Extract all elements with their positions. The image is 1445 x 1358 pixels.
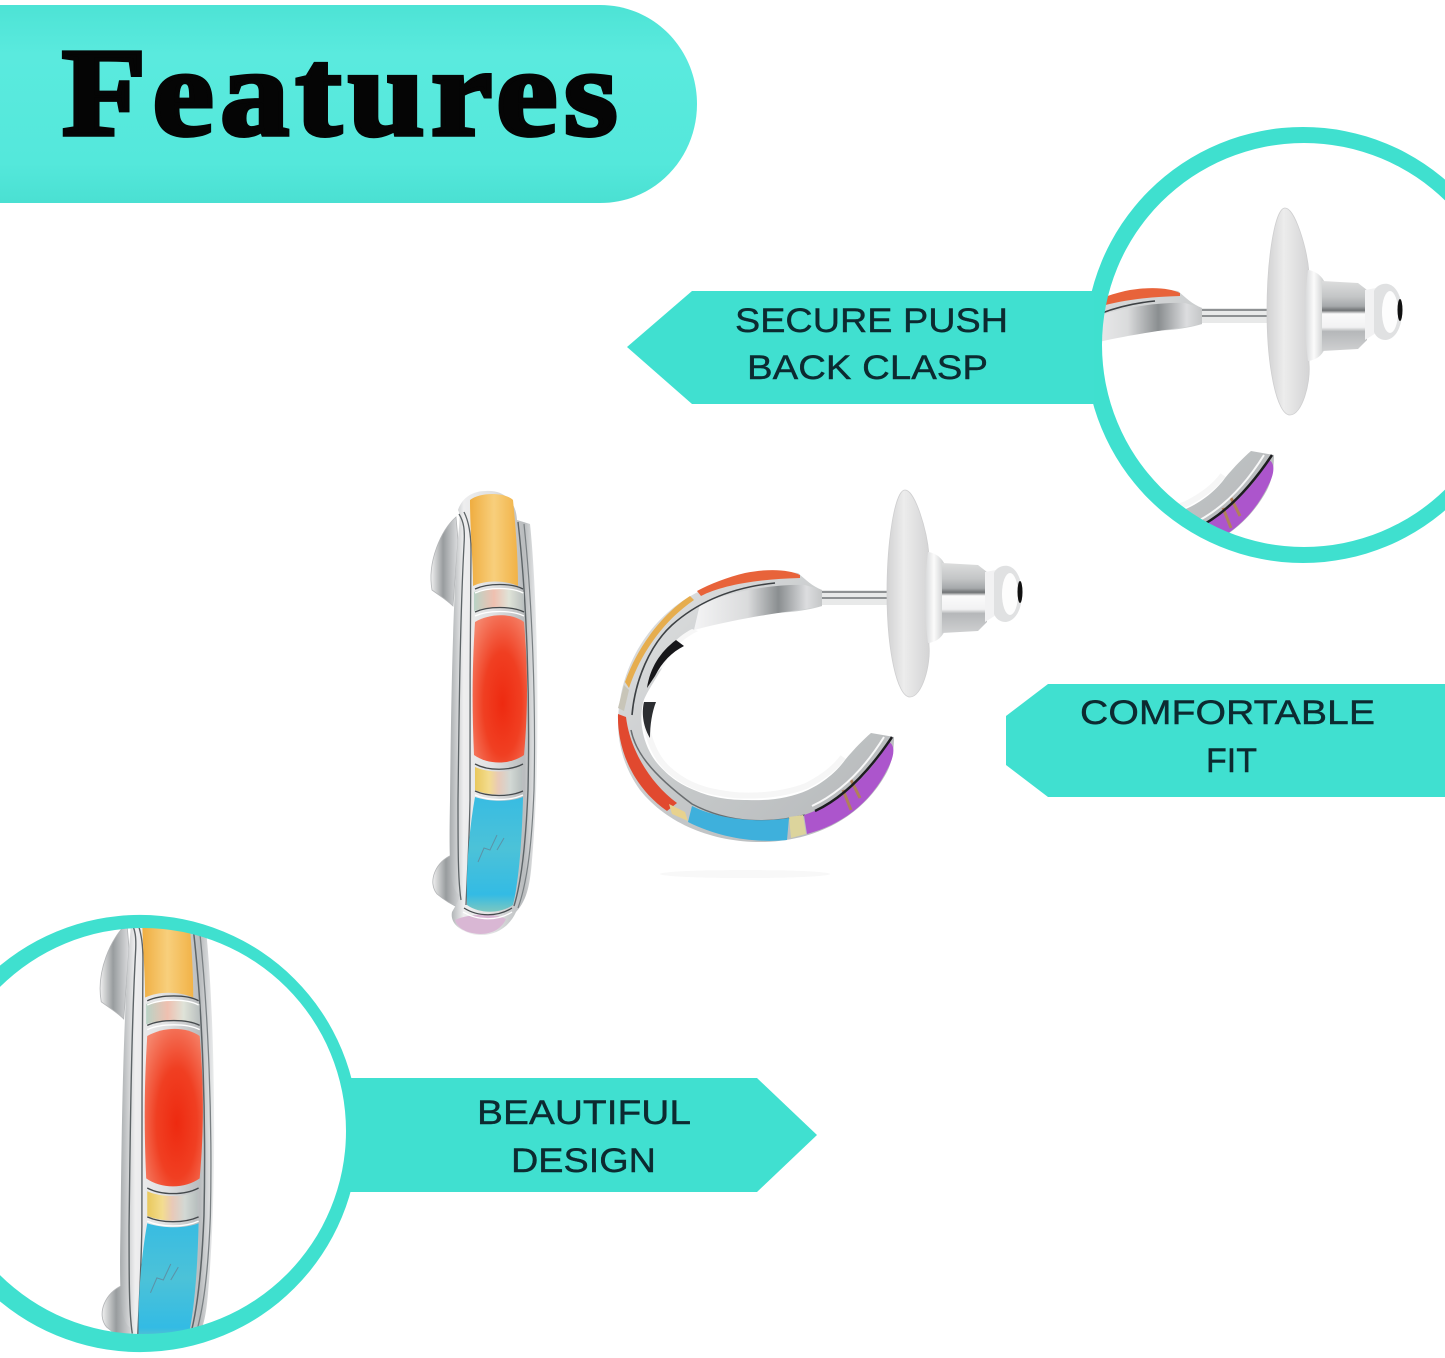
silver inner highlight xyxy=(646,720,843,796)
front view earring xyxy=(431,491,538,935)
red stone xyxy=(473,615,527,762)
header pill with title xyxy=(0,5,697,203)
silver neck shading xyxy=(694,585,822,630)
turquoise stone xyxy=(688,806,789,841)
callout: beautiful design xyxy=(350,1078,817,1192)
zoom circle: clasp detail xyxy=(1092,127,1445,563)
callout: secure push back clasp: BACK CLASP xyxy=(747,349,988,387)
callout: comfortable fit xyxy=(1006,684,1445,797)
white upper highlight xyxy=(657,629,698,672)
copper veins xyxy=(843,780,860,810)
title: Features: Features xyxy=(62,24,618,162)
clutch neck xyxy=(985,570,996,622)
circle ring xyxy=(0,915,358,1352)
rail lines left xyxy=(458,514,464,900)
turquoise stone xyxy=(467,797,523,912)
disc back xyxy=(887,490,929,697)
dark reflection upper xyxy=(647,640,684,688)
clutch black tip xyxy=(1018,581,1022,603)
purple stone xyxy=(804,742,893,834)
callout: comfortable fit: COMFORTABLE xyxy=(1080,694,1375,732)
clutch dome xyxy=(925,552,945,643)
silver body xyxy=(450,491,538,935)
rail lines right xyxy=(514,522,529,906)
magnified clasp xyxy=(1102,208,1402,533)
magnified stone band xyxy=(100,928,214,1334)
bottom inner crescent xyxy=(433,855,462,908)
clutch body xyxy=(942,563,987,633)
opal small left xyxy=(669,804,688,821)
side view earring with clutch xyxy=(618,490,1022,842)
orange stone xyxy=(697,570,800,596)
top inner crescent xyxy=(431,517,458,606)
black and white rim line near end xyxy=(815,737,892,811)
dark rim line xyxy=(632,583,775,715)
dark reflection lower xyxy=(643,702,656,738)
callout: beautiful design: BEAUTIFUL xyxy=(477,1094,691,1132)
clutch cap xyxy=(994,566,1022,622)
rim line lower xyxy=(631,730,805,821)
opal inlay lower xyxy=(475,767,522,794)
callout: secure push back clasp xyxy=(627,291,1094,404)
opal inlay upper xyxy=(474,588,524,611)
opal small right xyxy=(789,815,806,838)
turquoise veining xyxy=(478,835,504,862)
red stone xyxy=(618,714,677,811)
inlay divider lines xyxy=(463,584,524,919)
zoom circle: design detail xyxy=(0,896,358,1358)
callout: secure push back clasp: SECURE PUSH xyxy=(735,302,1008,340)
opal small upper xyxy=(618,685,629,711)
silver hoop xyxy=(618,572,894,842)
faint shadow below hoop xyxy=(660,870,830,878)
yellow stone xyxy=(625,596,694,688)
callout: comfortable fit: FIT xyxy=(1206,742,1257,780)
purple opal tip xyxy=(455,915,506,934)
callout: beautiful design: DESIGN xyxy=(511,1142,656,1180)
post xyxy=(815,590,892,605)
circle ring xyxy=(1085,127,1445,563)
yellow stone xyxy=(470,494,518,586)
